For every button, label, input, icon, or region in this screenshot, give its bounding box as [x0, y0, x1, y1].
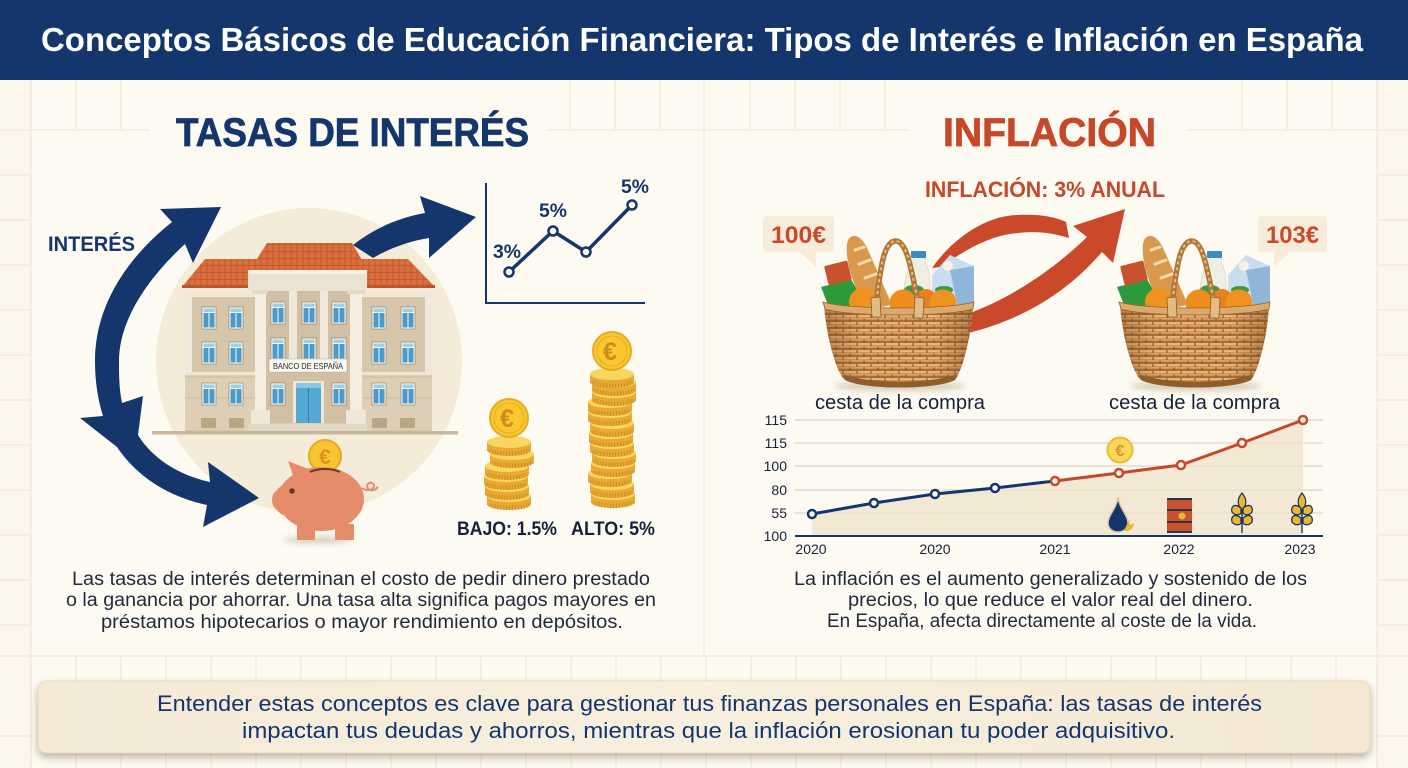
label: interés: INTERÉS [48, 233, 135, 256]
building: Banco de España [152, 243, 458, 434]
y axis labels: 55 [771, 505, 787, 521]
label: inflación 3% anual: INFLACIÓN: 3% ANUAL [925, 177, 1165, 202]
caption: basket: cesta de la compra [815, 392, 986, 414]
icon: wheat [1292, 493, 1312, 533]
description: tasas de interés: Las tasas de interés determinan el costo de pedir dinero prestado [72, 569, 650, 590]
price bubble 100€: 100€ [771, 222, 826, 249]
icon: low coin stack [484, 399, 534, 510]
icon: shopping basket later [1117, 236, 1270, 391]
data label 3%: 3% [493, 242, 521, 263]
caption: basket: cesta de la compra [1109, 392, 1281, 414]
y axis labels: 80 [771, 482, 787, 498]
panel: tasas de interés [48, 110, 656, 633]
description: tasas de interés [66, 569, 656, 633]
callout: conclusion: Entender estas conceptos es clave para gestionar tus finanzas personales en España: las tasas de interés [157, 691, 1262, 716]
data label 5%: 5% [621, 177, 649, 198]
heading: tasas de interés: TASAS DE INTERÉS [176, 110, 529, 155]
callout: conclusion: impactan tus deudas y ahorros, mientras que la inflación erosionan tu poder adquisitivo. [242, 718, 1175, 743]
background circle [156, 208, 462, 514]
icon: low coin stack: € [500, 405, 514, 433]
price bubble 103€ [1258, 216, 1327, 267]
y axis labels [764, 412, 787, 544]
title: Conceptos Básicos de Educación Financiera: Tipos de Interés e Inflación en España [41, 21, 1364, 58]
x axis labels: 2020 [919, 541, 951, 557]
sign text: BANCO DE ESPAÑA [273, 361, 343, 371]
icon: piggy bank: € [319, 446, 331, 469]
description: tasas de interés: préstamos hipotecarios o mayor rendimiento en depósitos. [101, 612, 623, 633]
line chart: inflation index [764, 412, 1323, 557]
arrow: price increase [932, 209, 1125, 333]
icon: barrel [1167, 498, 1192, 533]
description: inflación: precios, lo que reduce el valor real del dinero. [848, 590, 1253, 611]
y axis labels: 100 [764, 458, 787, 474]
y axis labels: 115 [765, 435, 787, 451]
line chart: interest rates [486, 177, 649, 303]
icon: high coin stack: € [603, 338, 617, 366]
x axis labels: 2021 [1039, 541, 1071, 557]
description: inflación: La inflación es el aumento generalizado y sostenido de los [794, 569, 1307, 590]
icon: high coin stack [588, 332, 636, 508]
description: inflación [794, 569, 1307, 632]
icon: oil drop [1108, 497, 1134, 532]
callout: conclusion [38, 681, 1370, 753]
x axis labels: 2020 [795, 541, 827, 557]
heading: inflación: INFLACIÓN [943, 109, 1156, 155]
label: bajo: BAJO: 1.5% [457, 519, 557, 540]
x axis labels: 2022 [1163, 541, 1195, 557]
icon: wheat [1232, 493, 1252, 533]
x axis labels: 2023 [1284, 541, 1316, 557]
y axis labels: 115 [765, 412, 787, 428]
y axis labels: 100 [764, 528, 787, 544]
icon: euro coin [1108, 438, 1132, 462]
price bubble 103€: 103€ [1266, 222, 1319, 249]
data label 5%: 5% [539, 201, 567, 222]
price bubble 100€ [763, 216, 834, 267]
panel: inflación [763, 109, 1327, 632]
description: tasas de interés: o la ganancia por ahorrar. Una tasa alta significa pagos mayores en [66, 590, 656, 611]
arrow: curved cycle [80, 207, 259, 527]
description: inflación: En España, afecta directamente al coste de la vida. [827, 611, 1257, 632]
icon: euro coin: € [1116, 443, 1125, 460]
label: alto: ALTO: 5% [571, 519, 655, 540]
icon: piggy bank [272, 440, 378, 544]
x axis labels [795, 541, 1316, 557]
icon: shopping basket 2020 [821, 236, 974, 391]
arrow: towards chart [353, 196, 476, 258]
header banner [0, 0, 1408, 80]
